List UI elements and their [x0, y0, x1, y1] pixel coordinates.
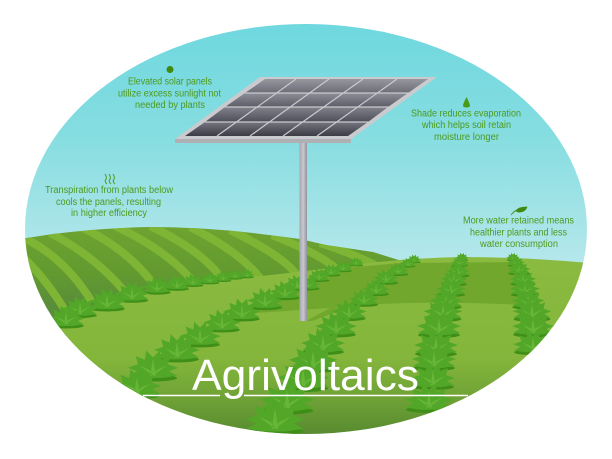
callout: sunlight: utilize excess sunlight not — [118, 88, 221, 100]
callout: transpiration: cools the panels, resulting — [56, 197, 161, 208]
sky — [25, 24, 587, 269]
callout: water retained: More water retained means — [463, 216, 574, 226]
icon: sun — [166, 66, 174, 73]
photovoltaic cells — [185, 79, 428, 136]
icon: heat waves — [105, 174, 115, 184]
icon: leaf — [511, 207, 527, 215]
striped hill — [20, 225, 410, 340]
pole shadow — [307, 308, 338, 321]
plant row 2 — [113, 257, 363, 399]
plant row 1 — [47, 269, 254, 328]
callout: sunlight — [118, 66, 221, 111]
back field dark band — [255, 262, 527, 313]
plant row 5 — [506, 253, 554, 355]
callout: water retained — [463, 207, 574, 250]
callout: transpiration: in higher efficiency — [71, 208, 147, 219]
callout: shade: moisture longer — [434, 132, 500, 143]
callout: transpiration: Transpiration from plants below — [45, 185, 174, 196]
panel frame — [175, 77, 437, 139]
solar panel on pole — [175, 77, 437, 321]
callout: water retained: healthier plants and less — [470, 228, 567, 238]
callout: transpiration — [45, 174, 174, 219]
plant row 4 — [405, 253, 470, 413]
callout: shade: Shade reduces evaporation — [411, 108, 521, 120]
cell grid — [205, 79, 409, 136]
callout: shade — [411, 97, 521, 143]
plant row 3 — [245, 255, 421, 436]
foreground field — [59, 257, 584, 434]
callout: sunlight: Elevated solar panels — [128, 76, 212, 88]
icon: water drop — [463, 97, 470, 108]
callout: sunlight: needed by plants — [135, 100, 205, 111]
callout: shade: which helps soil retain — [421, 120, 511, 131]
pole — [300, 143, 307, 321]
title: Agrivoltaics — [192, 351, 419, 400]
callout: water retained: water consumption — [479, 239, 558, 250]
